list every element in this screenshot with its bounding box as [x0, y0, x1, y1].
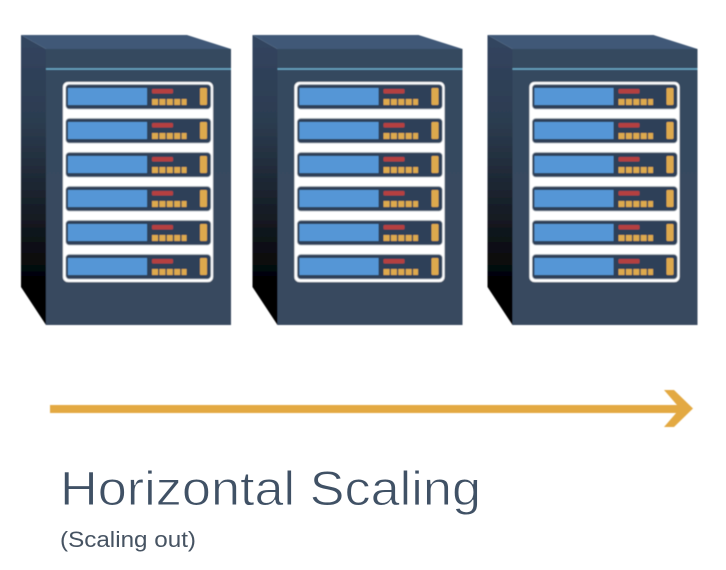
subtitle: (Scaling out): [60, 527, 196, 552]
title: Horizontal Scaling: [60, 463, 481, 516]
server rack 2: [252, 35, 462, 325]
arrow: scaling direction: [50, 390, 693, 427]
server rack 1: [21, 35, 231, 325]
server rack 3: [488, 35, 698, 325]
diagram: three server racks: [21, 35, 698, 325]
